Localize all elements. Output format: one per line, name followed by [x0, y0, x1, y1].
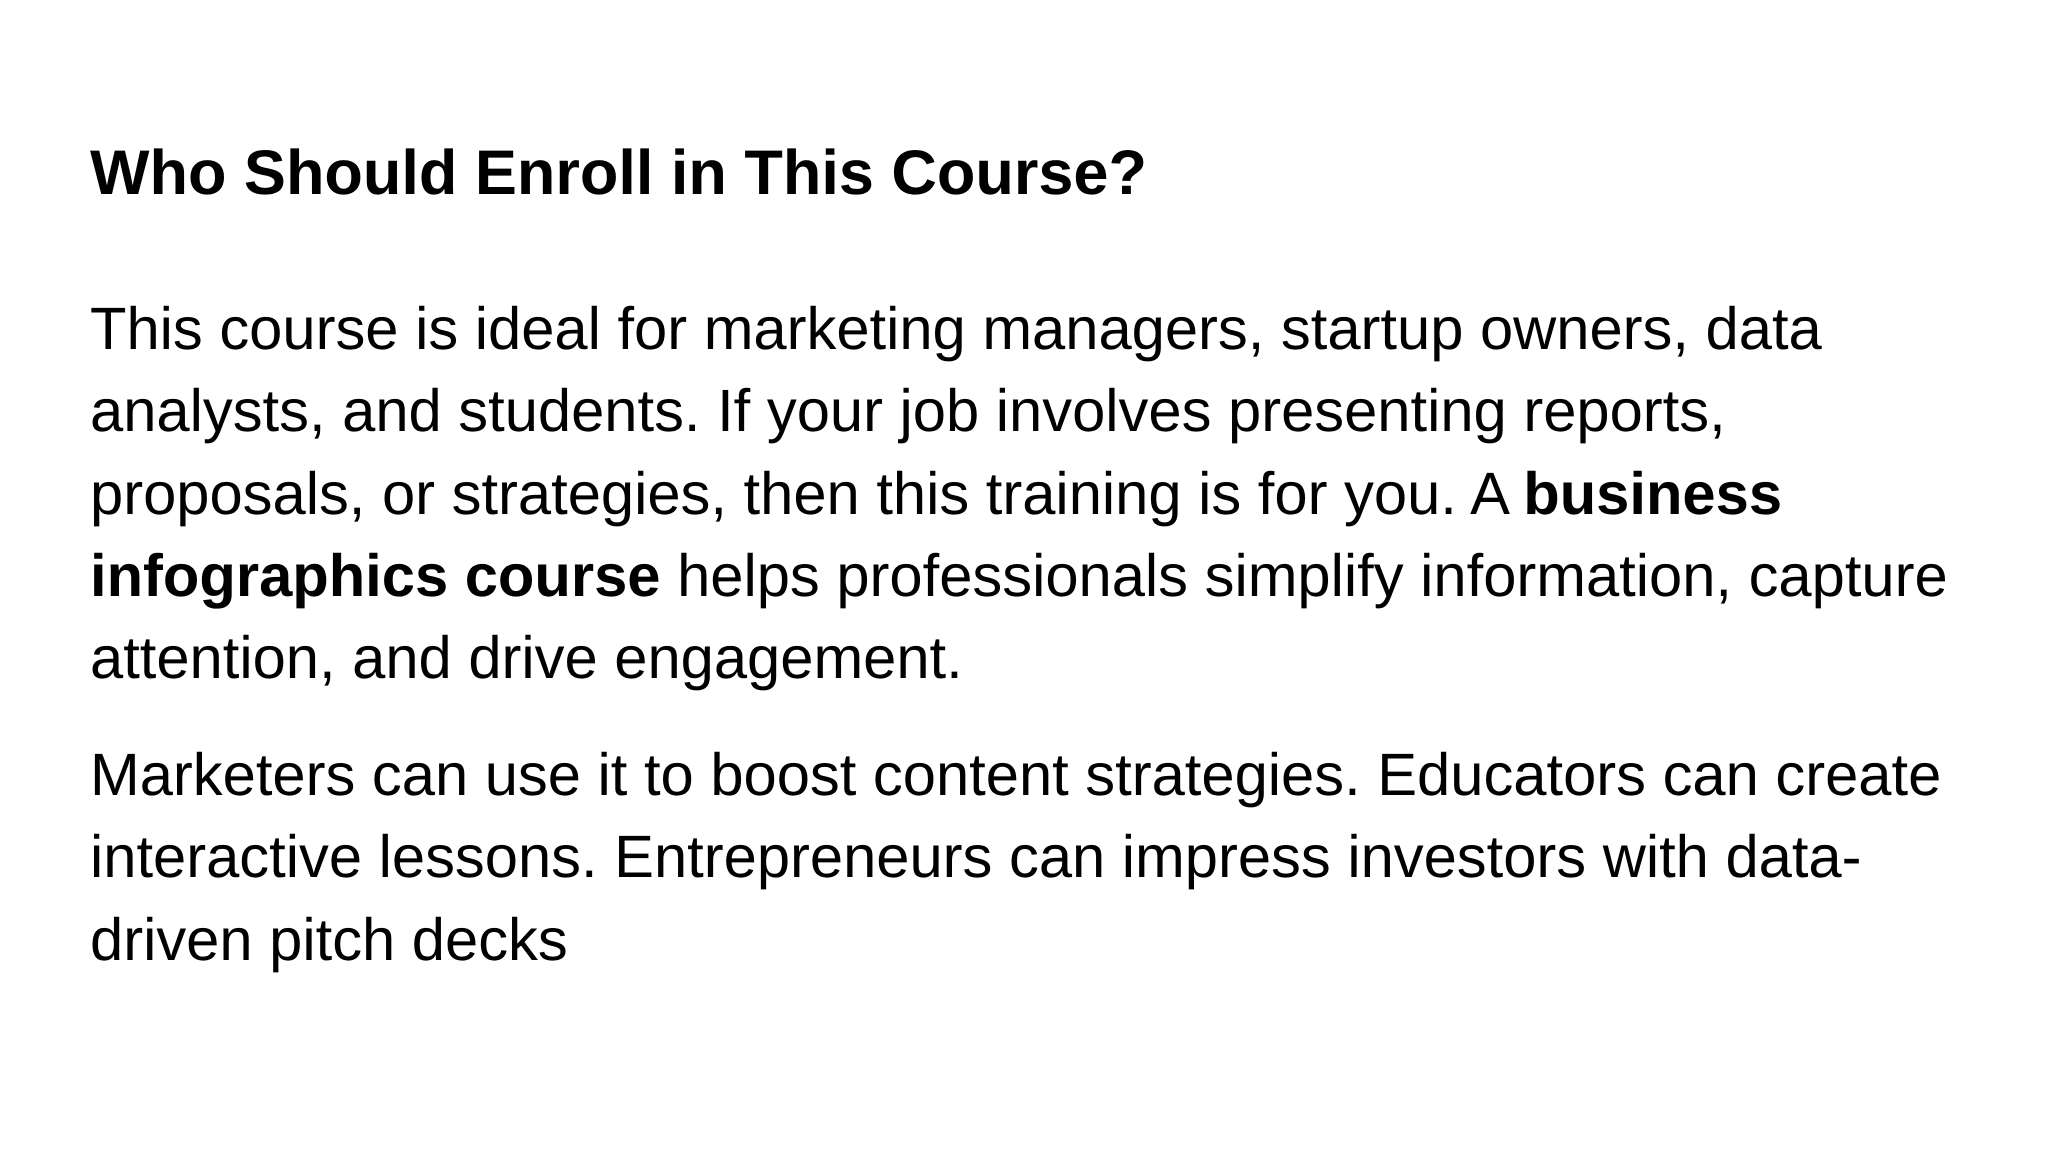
text block: paragraphs: Marketers can use it to boost content strategies. Educators can create	[90, 741, 1941, 808]
text block: paragraphs: attention, and drive engagement.	[90, 624, 963, 691]
text block: paragraphs: interactive lessons. Entrepreneurs can impress investors with data-	[90, 823, 1862, 890]
text block: paragraphs: infographics course helps professionals simplify information, capture	[90, 542, 1948, 609]
text block: paragraphs: analysts, and students. If your job involves presenting reports,	[90, 377, 1726, 444]
text block: paragraphs: proposals, or strategies, then this training is for you. A business	[90, 460, 1782, 527]
text block: paragraphs: This course is ideal for marketing managers, startup owners, data	[90, 295, 1822, 362]
text block: paragraphs: driven pitch decks	[90, 906, 568, 973]
title: Who Should Enroll in This Course?	[90, 138, 1147, 208]
